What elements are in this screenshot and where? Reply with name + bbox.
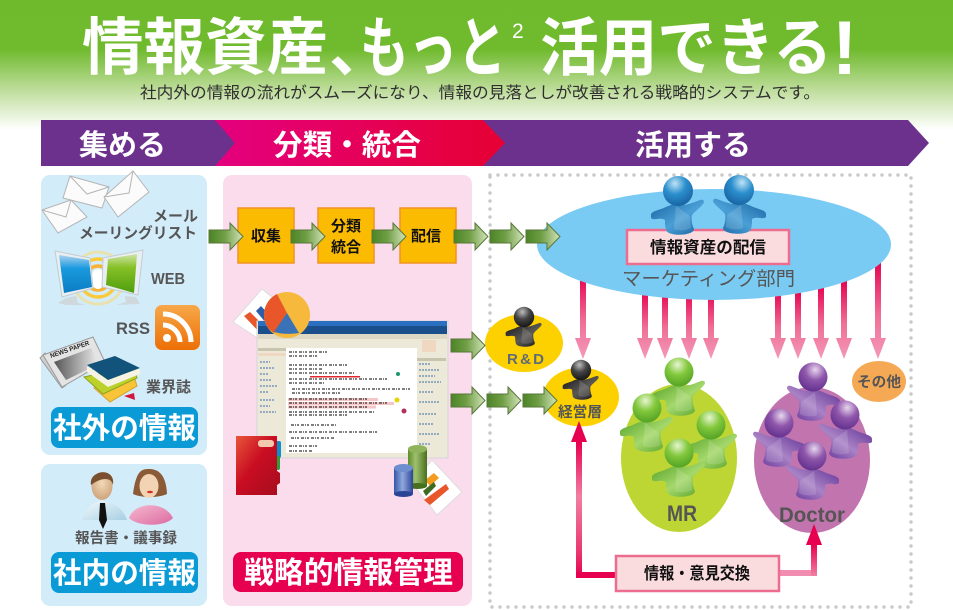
step: classify and integrate: 分類・統合 xyxy=(273,129,421,162)
title: 2 xyxy=(512,20,524,43)
group: R&D xyxy=(485,307,563,372)
green arrow: to R&D xyxy=(451,332,485,359)
icon: red folder xyxy=(236,436,281,495)
figure: black person xyxy=(563,360,599,400)
icon: RSS feed xyxy=(155,305,200,350)
label: mailing list: メーリングリスト xyxy=(79,224,197,242)
box: distribution: 配信 xyxy=(411,228,441,245)
panel: external information xyxy=(40,171,207,455)
label: reports and minutes: 報告書・議事録 xyxy=(75,529,178,547)
group: others: その他 xyxy=(857,374,902,391)
figure: blue person right xyxy=(713,175,766,234)
icon: newspaper: NEWS PAPER xyxy=(49,340,91,360)
title: 、 xyxy=(329,16,391,85)
icon: pie chart xyxy=(264,292,310,338)
box: information asset distribution: 情報資産の配信 xyxy=(650,238,767,257)
icon: newspaper xyxy=(40,337,105,388)
box: information asset distribution xyxy=(627,230,789,264)
pink arrows: distribution from marketing xyxy=(575,260,886,359)
label: trade journals: 業界誌 xyxy=(146,378,191,396)
icon: chart report with cylinders xyxy=(394,445,462,515)
figure: black person xyxy=(506,307,542,347)
arrow: exchange to executives xyxy=(571,421,618,578)
group: marketing department xyxy=(537,175,891,300)
group: others xyxy=(852,361,906,402)
title: 情報資産 xyxy=(82,14,328,83)
label: RSS: RSS xyxy=(116,319,150,338)
box: collection: 収集 xyxy=(251,227,281,245)
box: information and opinion exchange xyxy=(616,556,779,591)
label: mail: メール xyxy=(153,208,198,225)
step: collect xyxy=(41,120,236,166)
box: distribution xyxy=(400,208,456,263)
label: executives: 経営層 xyxy=(558,403,602,421)
group: executives xyxy=(543,360,619,426)
label: WEB: WEB xyxy=(151,271,185,288)
green arrows: to management xyxy=(451,387,557,414)
subtitle: 社内外の情報の流れがスムーズになり、情報の見落としが改善される戦略的システムです。 xyxy=(140,84,820,102)
group: Doctor xyxy=(753,362,872,533)
title: ! xyxy=(832,6,857,91)
heading: strategic information management: 戦略的情報管理 xyxy=(244,557,453,590)
step: use xyxy=(483,120,929,166)
title: 活用できる xyxy=(540,14,832,84)
label: Doctor: Doctor xyxy=(779,504,845,527)
box: information and opinion exchange: 情報・意見交換 xyxy=(644,564,750,583)
icon: web monitors xyxy=(55,250,143,305)
step: use: 活用する xyxy=(635,129,751,162)
icon: books xyxy=(84,356,140,402)
panel: internal information xyxy=(41,464,207,606)
icon: envelopes xyxy=(42,171,149,233)
step: classify and integrate xyxy=(215,120,505,166)
figure: blue person left xyxy=(651,176,704,235)
step: collect: 集める xyxy=(79,129,166,162)
heading: internal information: 社内の情報 xyxy=(53,557,196,590)
figure: green persons xyxy=(620,358,737,497)
icon: woman xyxy=(129,469,173,525)
box: collection xyxy=(238,208,294,263)
group: MR xyxy=(620,358,737,532)
screenshot: system screen xyxy=(257,321,448,458)
box: classify and integrate: 分類 xyxy=(331,218,361,235)
process bar xyxy=(41,120,929,166)
green arrows: collection to distribution flow xyxy=(209,223,560,250)
label: marketing department: マーケティング部門 xyxy=(622,268,795,290)
box: classify and integrate: 統合 xyxy=(331,239,361,256)
heading: external information: 社外の情報 xyxy=(53,412,196,445)
icon: man xyxy=(82,472,127,529)
panel: strategic information management xyxy=(223,175,472,606)
label: R&D: R&D xyxy=(507,351,544,368)
title: もっと xyxy=(360,11,506,85)
arrow: exchange to doctor xyxy=(778,524,822,576)
box: classify and integrate xyxy=(318,208,374,263)
background: green gradient header xyxy=(0,0,953,130)
figure: purple persons xyxy=(753,362,872,500)
panel frame: utilization area xyxy=(490,175,911,607)
icon: chart report behind pie xyxy=(233,289,288,343)
label: MR: MR xyxy=(667,501,697,526)
title xyxy=(82,6,857,91)
